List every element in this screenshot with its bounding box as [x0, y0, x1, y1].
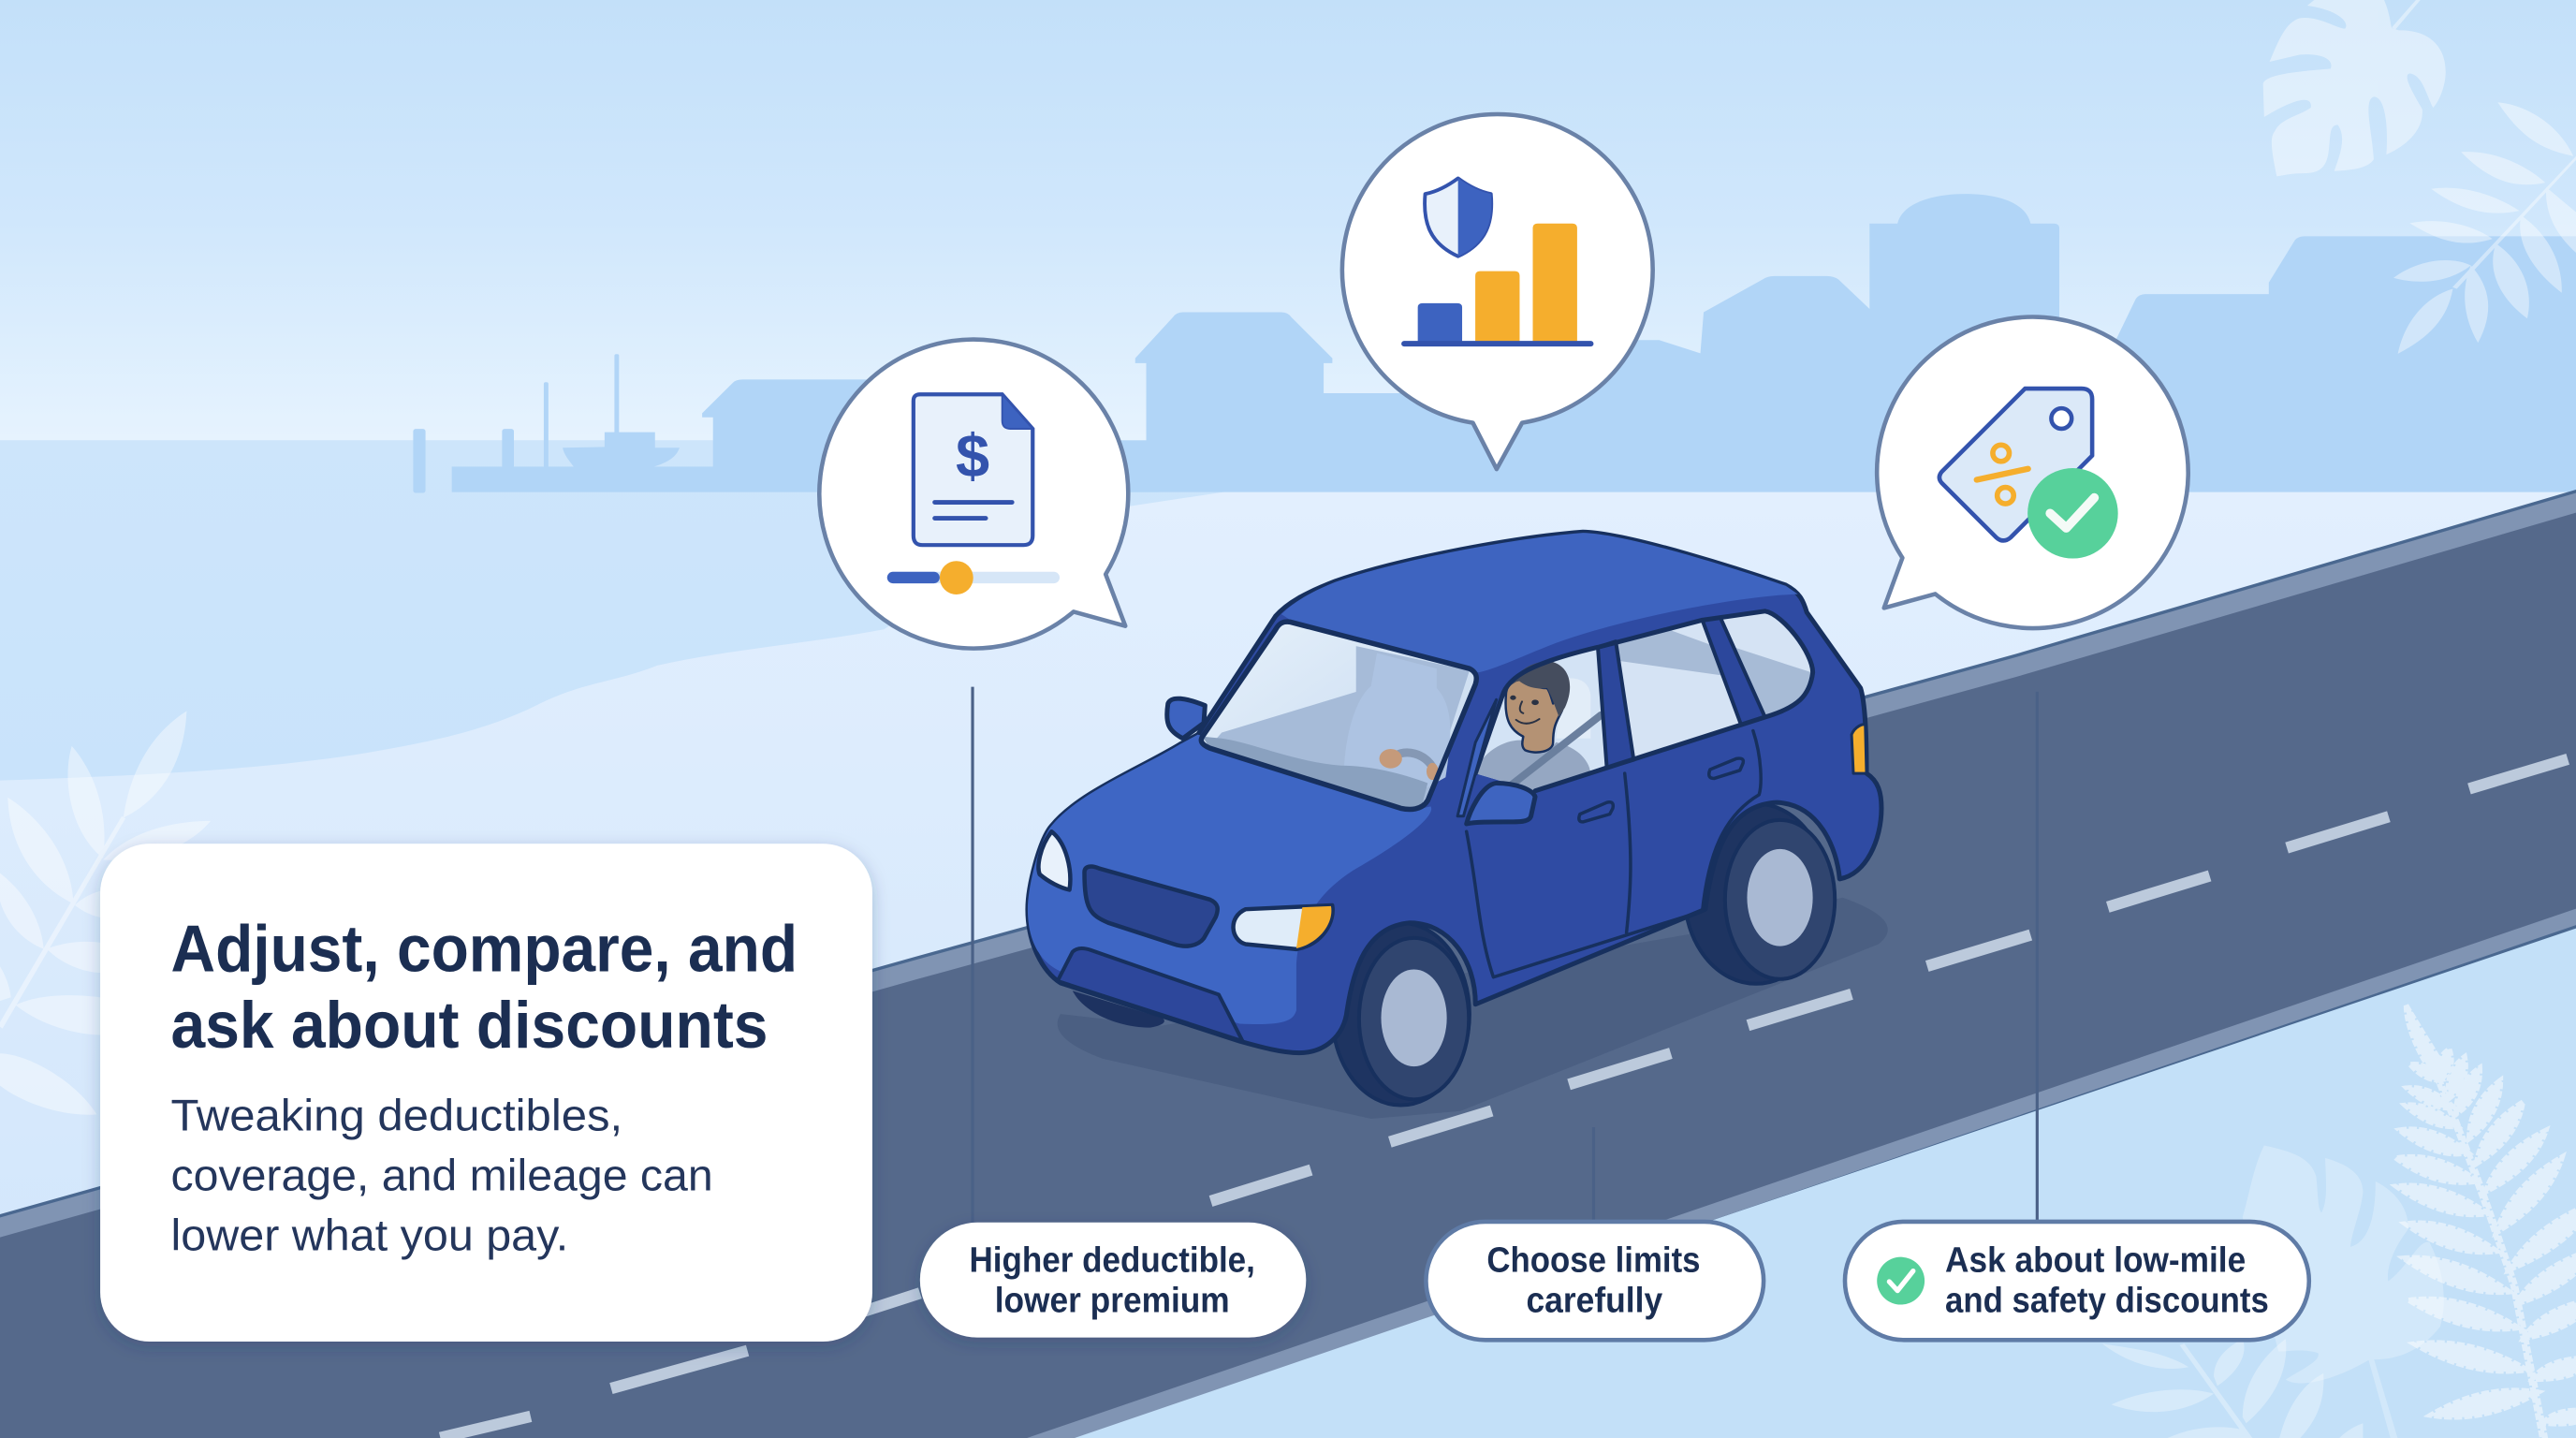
tail light — [1852, 725, 1866, 773]
bubble: discount tag — [1877, 317, 2188, 628]
card heading: ask about discounts — [171, 988, 768, 1062]
icon: bar chart — [1401, 224, 1593, 346]
door handles — [1579, 758, 1743, 822]
distant harbour and town silhouette — [413, 194, 2576, 493]
decorative leaves: top right monstera and branch — [2263, 0, 2576, 354]
bubble: deductible document and slider — [819, 340, 1128, 649]
text card — [100, 844, 872, 1342]
pill: choose limits: Choose limits — [1486, 1240, 1701, 1279]
grille — [1085, 867, 1218, 946]
icon: slider — [887, 561, 1060, 594]
far mirror — [1167, 698, 1205, 739]
pill: discounts with check — [1845, 1222, 2309, 1340]
car shadow — [1058, 898, 1888, 1119]
faint branch — [2102, 1339, 2363, 1438]
card body text: coverage, and mileage can — [171, 1152, 713, 1201]
card body text: lower what you pay. — [171, 1211, 568, 1261]
driver head — [1506, 680, 1562, 753]
decorative leaves: bottom right group — [2102, 1005, 2576, 1438]
rear quarter window — [1720, 612, 1813, 717]
A pillar highlight — [1457, 699, 1497, 816]
window pillars — [1598, 617, 1765, 768]
pill: higher deductible: Higher deductible, — [970, 1240, 1255, 1279]
rear wheel — [1684, 803, 1835, 984]
driver hair — [1512, 661, 1570, 717]
icon: price tag — [1939, 389, 2092, 540]
lane dashes — [440, 759, 2568, 1438]
underside — [1073, 990, 1164, 1028]
pill: higher deductible: lower premium — [995, 1280, 1230, 1319]
driver torso — [1475, 741, 1590, 791]
decorative leaves: left branch — [0, 711, 211, 1115]
pill: higher deductible — [920, 1223, 1306, 1338]
far headlight — [1039, 831, 1070, 889]
hood highlight — [1028, 735, 1431, 1024]
fern — [2395, 1005, 2576, 1438]
front wheel — [1332, 923, 1470, 1106]
car body — [1028, 532, 1881, 1053]
icon: small check — [1877, 1257, 1925, 1305]
near mirror — [1467, 783, 1535, 824]
icon: shield — [1425, 178, 1491, 257]
faint monstera — [2243, 1145, 2444, 1438]
bubble shape — [1342, 114, 1653, 469]
lower intake — [1058, 948, 1243, 1041]
card background — [100, 844, 872, 1342]
windshield — [1201, 622, 1476, 809]
bubble shape — [1877, 317, 2188, 628]
icon: green check badge — [2027, 468, 2118, 559]
roof highlight — [1281, 533, 1798, 672]
front side window and driver — [1475, 647, 1605, 791]
car illustration — [1028, 532, 1888, 1119]
pill: discounts with check: and safety discounts — [1945, 1280, 2269, 1319]
near headlight — [1234, 905, 1333, 949]
icon: document with dollar — [914, 394, 1032, 545]
road surface — [0, 490, 2576, 1438]
bubble: coverage limits shield and bars — [1342, 114, 1653, 469]
window frame outline — [1475, 611, 1813, 791]
rear door window — [1616, 620, 1741, 758]
road with curbs and lane dashes — [0, 490, 2576, 1438]
pill: discounts with check: Ask about low-mile — [1945, 1240, 2246, 1279]
card heading: Adjust, compare, and — [171, 911, 798, 985]
pill: choose limits — [1426, 1222, 1764, 1340]
card body text: Tweaking deductibles, — [171, 1092, 622, 1141]
door lines — [1467, 730, 1761, 977]
pill: choose limits: carefully — [1526, 1280, 1662, 1319]
icon: document with dollar: $ — [956, 421, 989, 490]
bubble shape — [819, 340, 1128, 649]
leader lines from bubbles to pills — [973, 687, 2037, 1225]
